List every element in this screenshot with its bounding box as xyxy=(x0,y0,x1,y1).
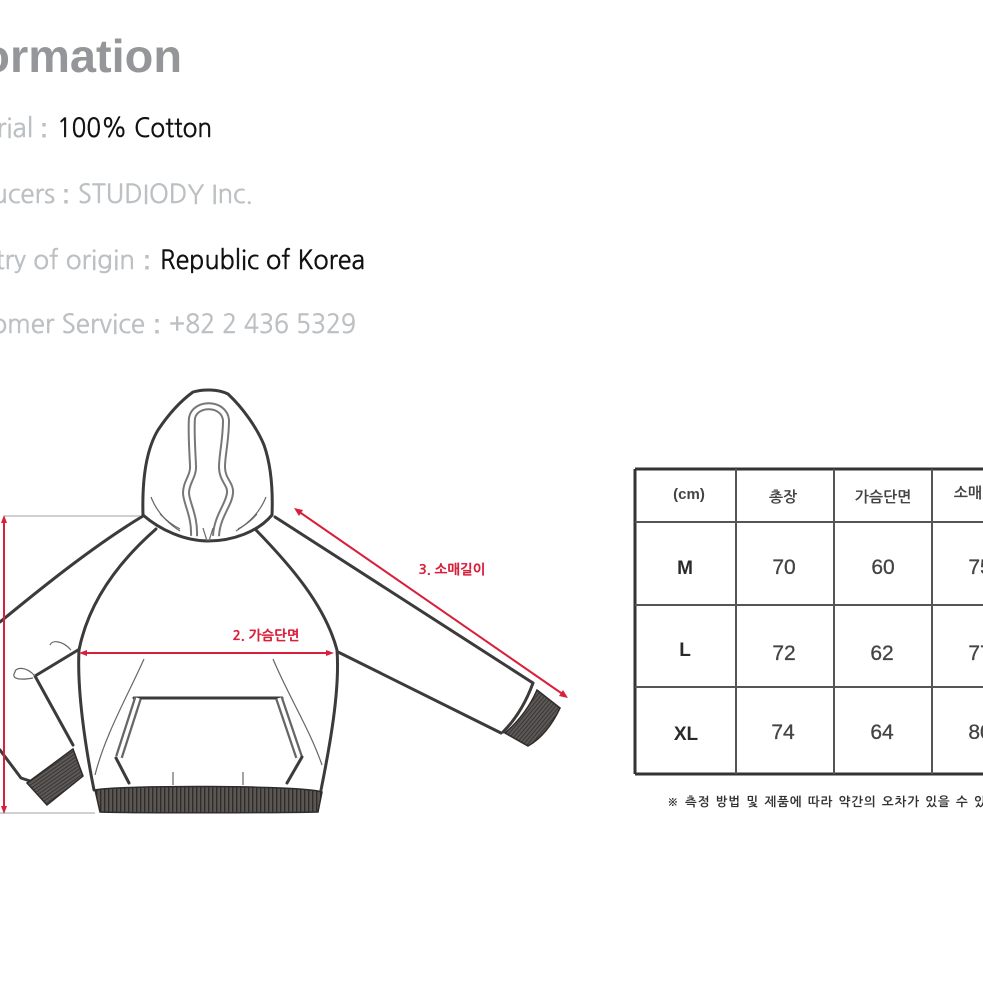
row XL xyxy=(674,721,983,745)
measurement guide: total length xyxy=(0,515,140,814)
country of origin line: : xyxy=(144,247,150,275)
customer service line: : xyxy=(154,311,160,339)
row M xyxy=(677,556,983,579)
header row xyxy=(673,485,983,505)
header row: 가슴단면 xyxy=(855,489,911,505)
material line: : xyxy=(41,115,47,143)
left sleeve xyxy=(0,516,143,805)
table grid xyxy=(635,469,983,774)
country of origin line xyxy=(0,247,365,275)
material line: 100% Cotton xyxy=(57,115,212,141)
hood xyxy=(143,390,272,541)
row L: 62 xyxy=(870,642,894,665)
measurement guide: sleeve length xyxy=(294,508,568,698)
row L: L xyxy=(679,640,691,661)
label: sleeve: 3. 소매길이 xyxy=(419,562,485,577)
hoodie technical drawing xyxy=(0,390,560,813)
row L xyxy=(679,640,983,665)
body xyxy=(79,529,338,790)
row L: 72 xyxy=(772,642,796,665)
hem ribbing xyxy=(95,786,322,813)
material line xyxy=(0,115,212,143)
country of origin line: Republic of Korea xyxy=(160,247,365,273)
label: chest: 2. 가슴단면 xyxy=(233,628,299,643)
header row: 총장 xyxy=(769,489,797,505)
header row: (cm) xyxy=(673,486,705,503)
right sleeve xyxy=(275,517,560,746)
row M: M xyxy=(677,558,693,579)
row XL: 74 xyxy=(771,721,795,744)
row XL: 64 xyxy=(870,721,894,744)
customer service line xyxy=(0,311,356,339)
size table xyxy=(635,469,983,774)
front pocket xyxy=(116,698,302,785)
producers line xyxy=(0,181,253,209)
producers line: : xyxy=(63,181,69,209)
row XL: XL xyxy=(674,724,699,745)
producers line: STUDIODY Inc. xyxy=(78,181,253,207)
row M: 60 xyxy=(871,556,895,579)
measurement guide: chest width xyxy=(79,628,334,656)
text block: product information xyxy=(0,115,365,339)
row M: 70 xyxy=(772,556,796,579)
customer service line: +82 2 436 5329 xyxy=(169,311,356,337)
